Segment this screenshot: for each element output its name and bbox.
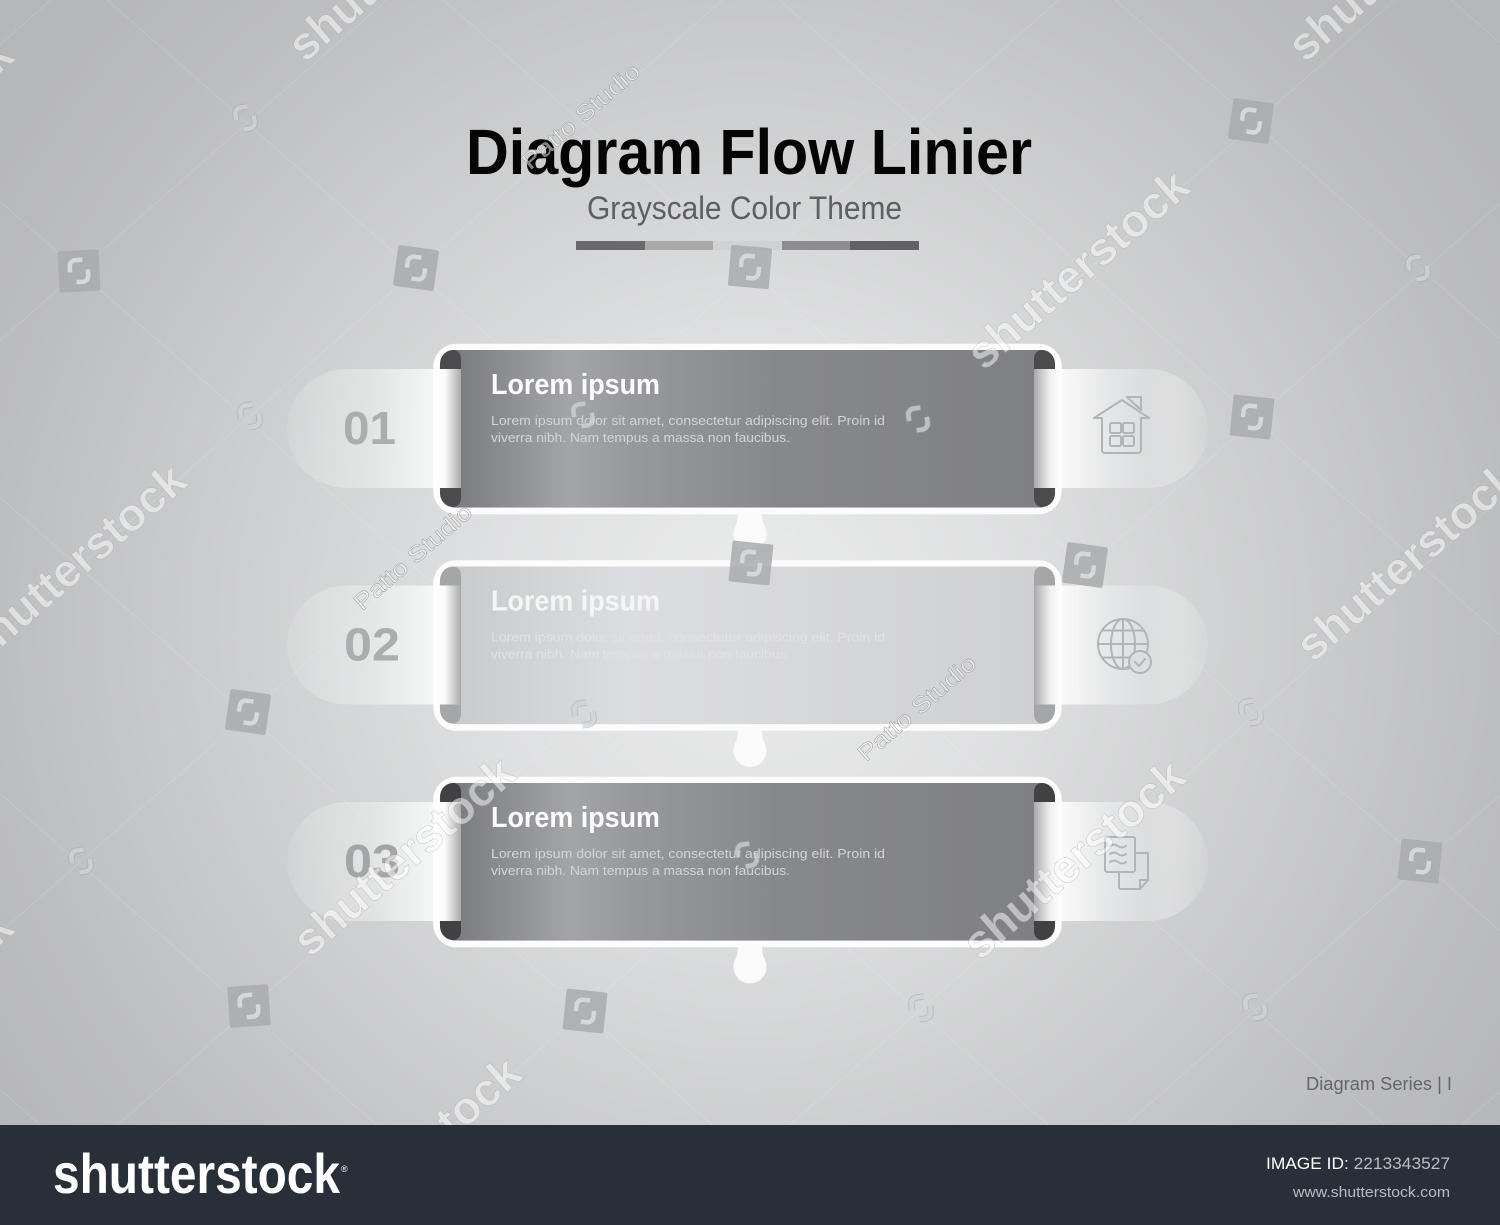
panel: step 03 (287, 780, 1208, 983)
registered mark: ® (341, 1164, 348, 1174)
panel: step 01 (287, 347, 1208, 550)
number 01: 01 (343, 402, 396, 454)
corner tabs (440, 566, 1055, 724)
body text (491, 846, 885, 878)
footer logo: shutterstock (53, 1142, 341, 1205)
icon: house (1094, 397, 1149, 453)
panel: step 02 (287, 564, 1208, 767)
left fold (434, 802, 461, 921)
watermark: Patto Studio: Patto Studio (348, 499, 477, 615)
right fold (1034, 802, 1062, 921)
icon: documents (1105, 837, 1148, 889)
watermark: Patto Studio: Patto Studio (516, 58, 645, 174)
body text (491, 630, 885, 662)
body text: Lorem ipsum dolor sit amet, consectetur adipiscing elit. Proin id (491, 413, 885, 428)
series label: Diagram Series | I (1306, 1074, 1452, 1094)
card body (452, 783, 1043, 940)
card body (452, 566, 1043, 724)
watermark: shutterstock: shutterstock (952, 748, 1195, 969)
title: Diagram Flow Linier (466, 116, 1032, 188)
pill right: icon (1060, 802, 1208, 921)
subtitle: Grayscale Color Theme (587, 190, 902, 226)
pill left: 02 (287, 586, 436, 704)
watermark: shutterstock: shutterstock (956, 158, 1199, 379)
image id: IMAGE ID: 2213343527 (1266, 1154, 1450, 1173)
title divider bar (576, 241, 919, 250)
card frame (436, 780, 1058, 944)
watermark: Patto Studio: Patto Studio (852, 650, 981, 766)
pill left: 01 (287, 369, 436, 488)
number 03: 03 (344, 835, 400, 887)
body text (491, 413, 885, 445)
body text: viverra nibh. Nam tempus a massa non faucibus. (491, 646, 790, 662)
right fold (1034, 369, 1062, 488)
right fold (1034, 586, 1062, 704)
body text: viverra nibh. Nam tempus a massa non faucibus. (491, 430, 790, 445)
body text: viverra nibh. Nam tempus a massa non faucibus. (491, 863, 790, 878)
watermark: Patto Studio (348, 58, 981, 766)
pill left: 03 (287, 802, 436, 921)
card frame (436, 347, 1058, 511)
body text: Lorem ipsum dolor sit amet, consectetur adipiscing elit. Proin id (491, 846, 885, 861)
left fold (434, 586, 461, 704)
website: www.shutterstock.com (1292, 1184, 1450, 1201)
pill right: icon (1060, 586, 1208, 704)
connector bulb (733, 728, 766, 767)
card frame (436, 564, 1058, 728)
footer bar (0, 1125, 1500, 1225)
card body (452, 350, 1043, 508)
number 02: 02 (344, 618, 400, 670)
pill right: icon (1060, 369, 1208, 488)
heading: Lorem ipsum (491, 802, 660, 834)
connector bulb (733, 945, 766, 983)
corner tabs (440, 783, 1055, 940)
icon: globe with check (1098, 619, 1151, 673)
heading: Lorem ipsum (491, 369, 660, 401)
corner tabs (440, 350, 1055, 507)
heading: Lorem ipsum (491, 586, 660, 618)
body text: Lorem ipsum dolor sit amet, consectetur adipiscing elit. Proin id (491, 630, 885, 644)
connector bulb (733, 512, 766, 550)
watermark: small outlined glyphs (71, 106, 1428, 1020)
watermark: logo squares (57, 98, 1443, 1034)
watermark: shutterstock: shutterstock (282, 745, 525, 966)
left fold (434, 369, 461, 488)
